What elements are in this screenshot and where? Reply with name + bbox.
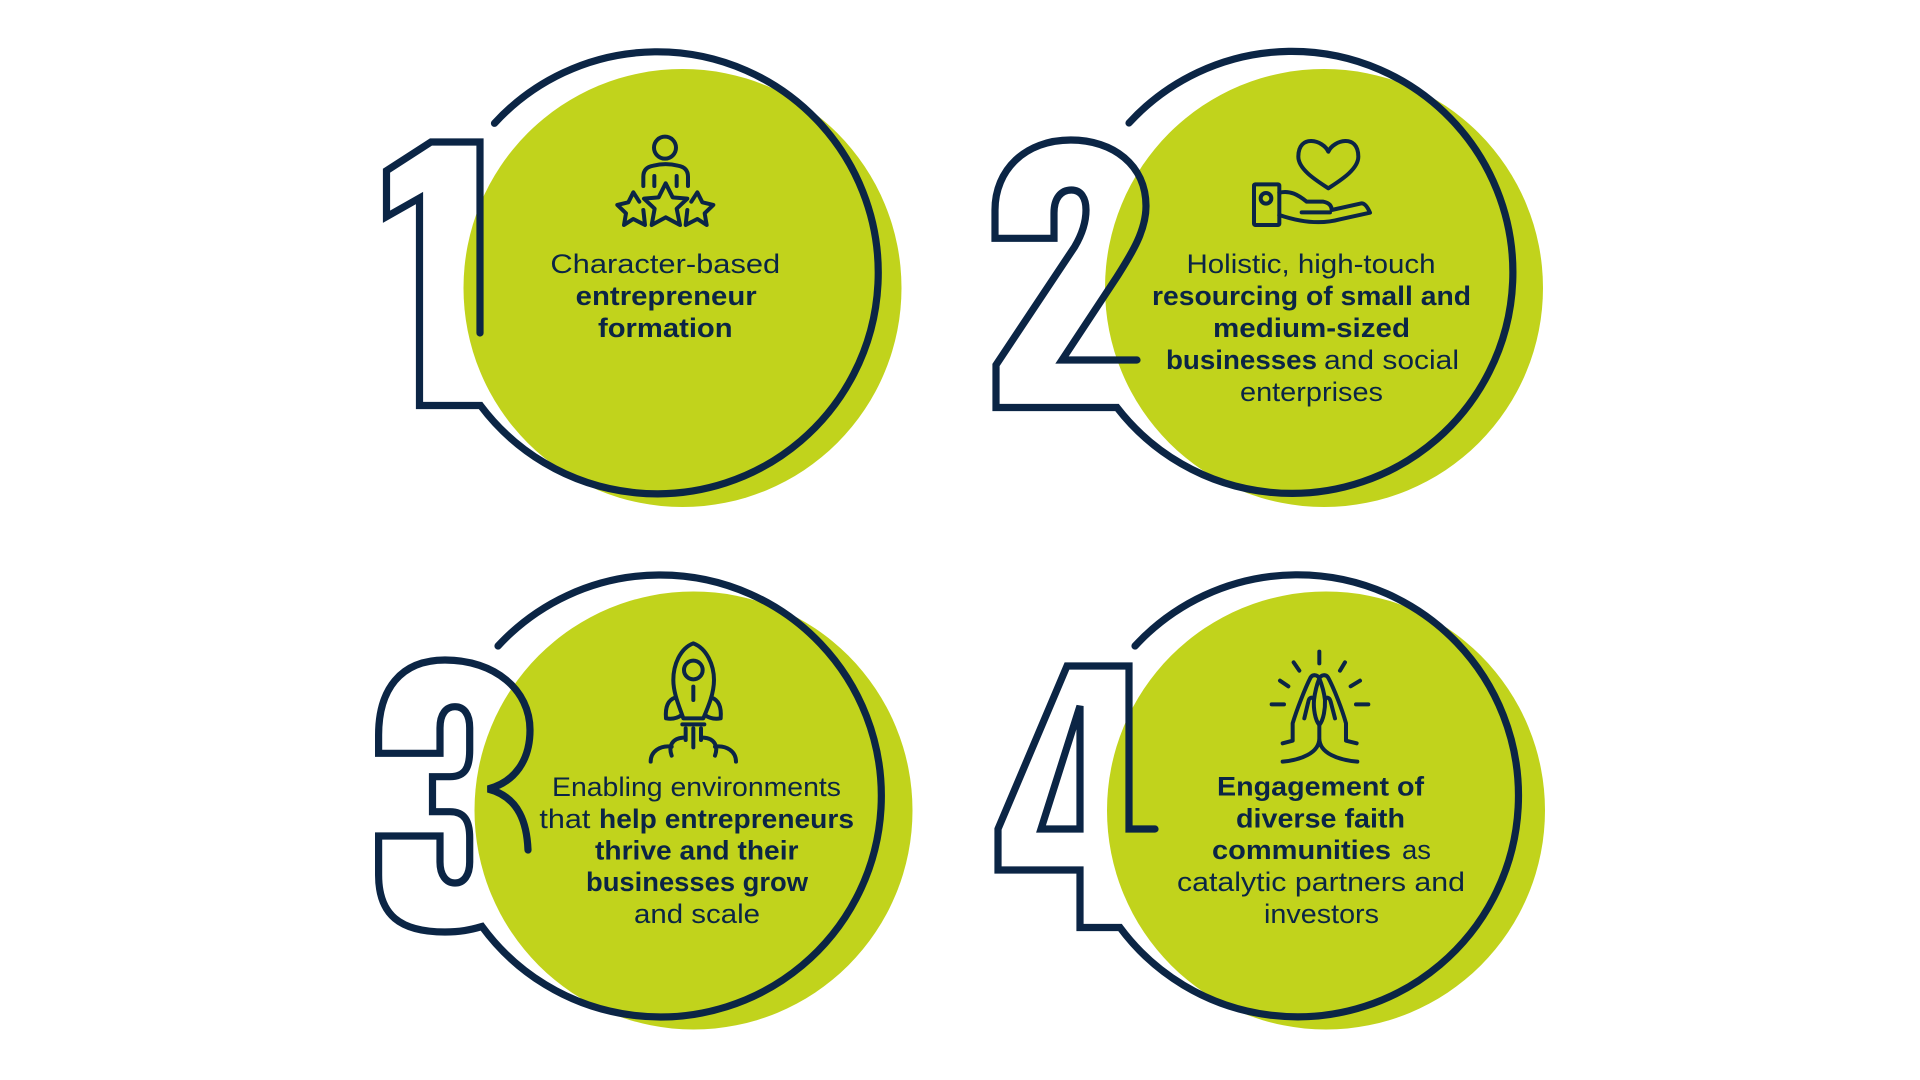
- text: step 3 description: thrive and their: [595, 836, 799, 866]
- text: step 4 description: as: [1402, 835, 1431, 865]
- text: step 2 description: [1152, 249, 1471, 407]
- numeral 2 with ring outline: [995, 51, 1513, 493]
- text: step 4 description: diverse faith: [1236, 804, 1405, 834]
- green circle 4: [1107, 592, 1545, 1030]
- text: step 3 description: help entrepreneurs: [599, 804, 854, 834]
- numeral 3 with ring outline: [379, 575, 881, 1017]
- panel: step 2: [995, 51, 1543, 507]
- text: step 2 description: Holistic, high-touch: [1186, 249, 1436, 279]
- text: step 1 description: [550, 249, 780, 343]
- text: step 3 description: and scale: [634, 899, 760, 929]
- text: step 3 description: [539, 772, 854, 929]
- text: step 2 description: and social: [1324, 345, 1459, 375]
- text: step 2 description: resourcing of small and: [1152, 281, 1471, 311]
- numeral 4 with ring outline: [998, 575, 1518, 1017]
- text: step 2 description: businesses: [1166, 345, 1317, 375]
- icon: hand holding heart: [1254, 141, 1370, 225]
- icon: praying hands: [1272, 652, 1368, 762]
- text: step 2 description: medium-sized: [1213, 313, 1410, 343]
- text: step 4 description: catalytic partners and: [1177, 867, 1465, 897]
- text: step 4 description: Engagement of: [1217, 772, 1425, 802]
- numeral 1 with ring outline: [386, 52, 878, 494]
- green circle 1: [464, 69, 902, 507]
- panel: step 4: [998, 575, 1545, 1030]
- text: step 1 description: entrepreneur: [576, 281, 757, 311]
- text: step 3 description: businesses grow: [586, 867, 809, 897]
- green circle 3: [474, 592, 912, 1030]
- numeral 4 inner counter: [1041, 706, 1080, 829]
- text: step 4 description: investors: [1264, 899, 1379, 929]
- text: step 1 description: formation: [598, 313, 733, 343]
- text: step 1 description: Character-based: [550, 249, 780, 279]
- icon: rocket launch: [651, 643, 736, 762]
- icon: person with three stars: [617, 137, 713, 225]
- text: step 4 description: communities: [1212, 835, 1391, 865]
- text: step 4 description: [1177, 772, 1465, 929]
- panel: step 1: [386, 52, 902, 507]
- text: step 2 description: enterprises: [1240, 377, 1383, 407]
- green circle 2: [1105, 69, 1543, 507]
- text: step 3 description: that: [539, 804, 591, 834]
- panel: step 3: [379, 575, 913, 1030]
- text: step 3 description: Enabling environments: [552, 772, 841, 802]
